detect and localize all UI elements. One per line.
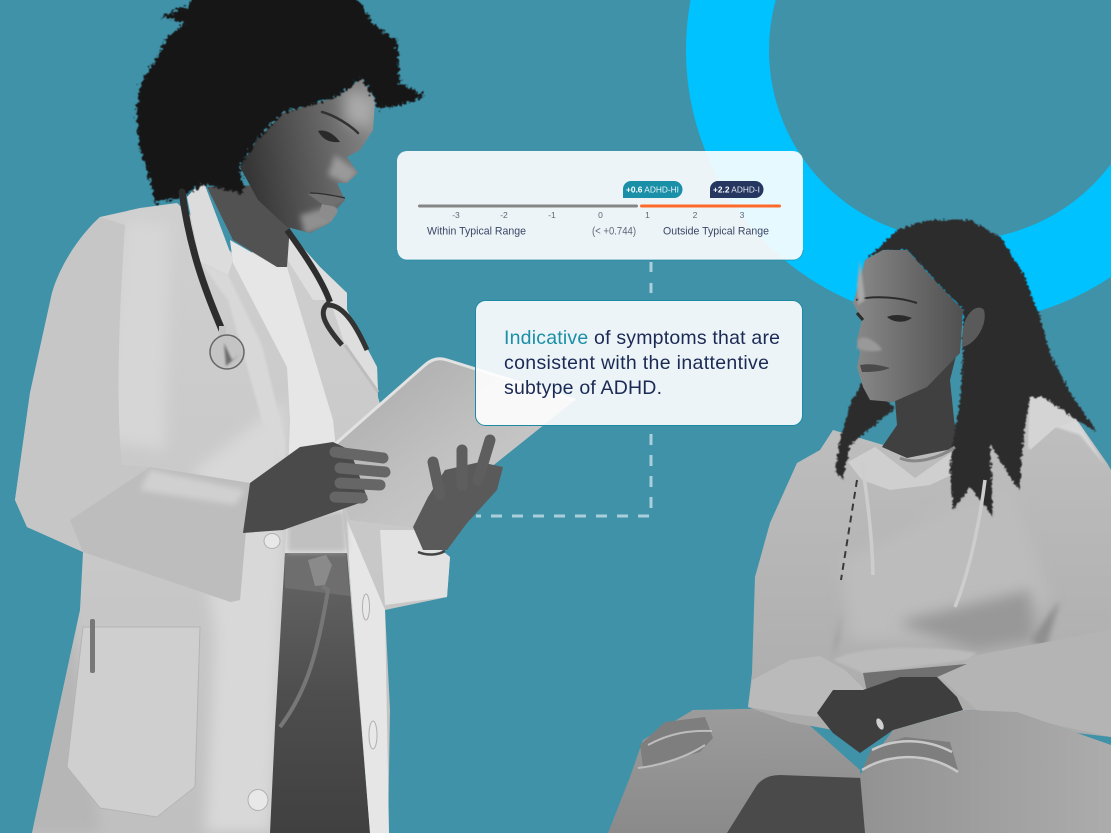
coat left collar	[187, 180, 233, 275]
axis numbers: 2	[693, 210, 698, 220]
broken dark seam	[841, 480, 857, 580]
score scale card	[397, 151, 803, 260]
chest piece detail	[224, 343, 240, 366]
doctor facial features	[300, 88, 376, 235]
sleeve highlight	[140, 470, 245, 505]
hood right highlight	[1030, 390, 1077, 450]
woman hoodie	[748, 388, 1111, 737]
woman neck	[882, 340, 960, 458]
woman face	[853, 250, 963, 402]
hood collar	[848, 447, 962, 490]
range labels: Within Typical Range	[427, 226, 526, 238]
doctor face	[240, 78, 375, 233]
axis numbers: -3	[452, 210, 460, 220]
outside range bar	[640, 204, 781, 208]
callout text: consistent with the inattentive	[504, 352, 769, 374]
axis numbers: 0	[598, 210, 603, 220]
dashed connector line	[476, 262, 651, 516]
doctor shirt	[230, 240, 347, 553]
photo: seated young woman	[608, 220, 1111, 833]
coat shading	[20, 220, 285, 833]
woman long hair	[865, 220, 1097, 517]
decorative cyan ring	[728, 0, 1111, 282]
hoodie drawstrings	[862, 463, 985, 607]
axis numbers: -2	[500, 210, 508, 220]
coat left front edge	[200, 262, 285, 470]
tablet	[325, 359, 575, 528]
knee rip right	[862, 737, 958, 772]
doctor jeans	[270, 553, 370, 833]
axis numbers	[452, 210, 745, 220]
coat buttons	[248, 534, 377, 810]
hair left strands	[835, 380, 895, 480]
hoodie right sleeve and cuff	[940, 630, 1111, 737]
woman ring	[875, 717, 885, 731]
badge: ADHD-I	[710, 181, 764, 198]
axis numbers: 3	[740, 210, 745, 220]
range labels	[427, 226, 769, 238]
doctor white right cuff	[380, 530, 450, 605]
shirt shadow above belt	[287, 510, 347, 552]
doctor right hand	[413, 440, 503, 550]
range labels: (< +0.744)	[592, 226, 636, 238]
woman jeans waist	[863, 664, 967, 692]
woman jeans right leg	[860, 710, 1111, 833]
doctor sleeve	[15, 217, 250, 602]
tablet top edge highlight	[325, 359, 575, 453]
doctor bracelet	[418, 551, 445, 555]
within range bar	[418, 204, 638, 208]
hoodie left cuff	[748, 656, 865, 717]
pen in pocket	[90, 619, 95, 673]
necklace	[900, 447, 955, 461]
knee rip left	[638, 717, 713, 768]
woman facial features	[856, 260, 917, 372]
axis numbers: -1	[548, 210, 556, 220]
doctor neck	[207, 185, 290, 267]
callout text: subtype of ADHD.	[504, 377, 662, 399]
badge: ADHD-I: +2.2 ADHD-I	[713, 184, 760, 194]
coat pocket	[67, 627, 200, 817]
callout text	[504, 327, 780, 399]
doctor belt and waistband	[280, 553, 350, 727]
doctor afro hair	[136, 0, 425, 203]
range labels: Outside Typical Range	[663, 226, 769, 238]
badge: ADHD-HI	[623, 181, 682, 198]
stethoscope chest piece	[210, 335, 244, 369]
woman clasped hands	[817, 677, 963, 753]
doctor lab coat	[15, 203, 450, 833]
woman jeans left leg	[608, 708, 865, 833]
hoodie shading	[832, 390, 1105, 673]
callout text: Indicative of symptoms that are	[504, 327, 780, 349]
coat right lapel	[347, 520, 389, 833]
sleeve cuff	[70, 467, 250, 602]
interpretation callout card	[476, 300, 802, 426]
gap between legs	[727, 775, 866, 833]
axis numbers: 1	[645, 210, 650, 220]
stethoscope	[182, 192, 378, 392]
photo: doctor with tablet	[15, 0, 575, 833]
coat right collar	[283, 230, 378, 390]
doctor left hand	[243, 442, 385, 533]
badge: ADHD-HI: +0.6 ADHD-HI	[626, 184, 679, 194]
woman ear	[962, 308, 985, 347]
